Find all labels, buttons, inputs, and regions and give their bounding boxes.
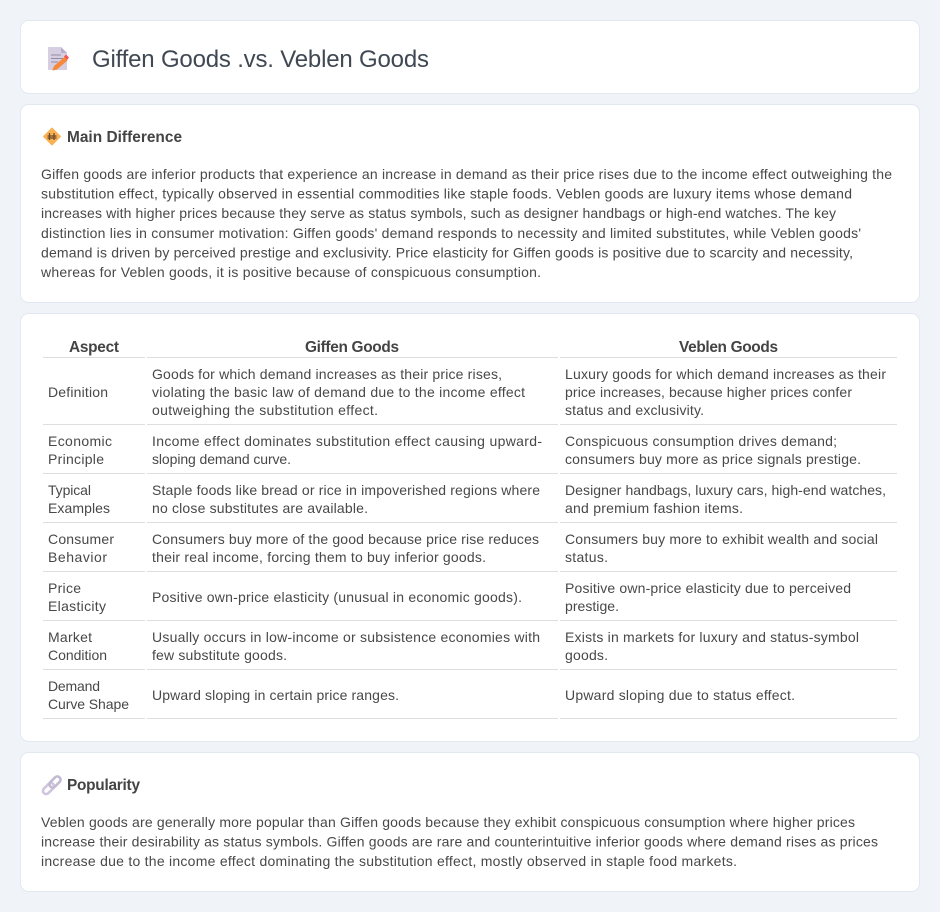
table row: demand curve shape: Upward sloping due to status effect. — [565, 687, 795, 703]
table row: market condition: Condition — [48, 647, 107, 663]
text block: popularity paragraph: Veblen goods are generally more popular than Giffen goods because they exhibit conspicuous consumption where higher prices — [41, 814, 855, 830]
table row: consumer behavior: Behavior — [48, 549, 107, 565]
icon: diamond road sign — [44, 128, 60, 145]
table row: price elasticity — [43, 580, 897, 621]
table row: typical examples: Designer handbags, luxury cars, high-end watches, — [565, 482, 886, 498]
table row: price elasticity: prestige. — [565, 598, 619, 614]
text block: main difference paragraph — [40, 166, 892, 280]
table row: economic principle: Income effect dominates substitution effect causing upward- — [152, 433, 542, 449]
table row: market condition: Market — [48, 629, 92, 645]
table row: market condition: Exists in markets for luxury and status-symbol — [565, 629, 859, 645]
text block: main difference paragraph: whereas for Veblen goods, it is positive because of conspicuous consumption. — [40, 264, 541, 280]
table header row — [43, 339, 897, 358]
text block: main difference paragraph: substitution effect, typically observed in essential commodities like staple foods. Veblen goods are luxury items whose demand — [41, 186, 852, 202]
table row: demand curve shape: Curve Shape — [48, 696, 129, 712]
table row: economic principle: Principle — [48, 451, 104, 467]
table row: typical examples: and premium fashion items. — [565, 500, 743, 516]
table row: consumer behavior: Consumer — [48, 531, 114, 547]
table row: economic principle: sloping demand curve. — [152, 451, 291, 467]
table row: economic principle: Conspicuous consumption drives demand; — [565, 433, 837, 449]
table row: consumer behavior: Consumers buy more to exhibit wealth and social — [565, 531, 878, 547]
heading: popularity: Popularity — [67, 777, 140, 794]
table row: economic principle: Economic — [48, 433, 112, 449]
table row: market condition — [43, 629, 897, 670]
title: Giffen Goods .vs. Veblen Goods — [92, 46, 429, 73]
table row: economic principle — [43, 433, 897, 474]
panel: comparison table — [20, 314, 920, 742]
table row: definition: Luxury goods for which demand increases as their — [565, 366, 886, 382]
panel: title header — [20, 20, 920, 94]
table row: definition: Goods for which demand increases as their price rises, — [152, 366, 502, 382]
table row: consumer behavior — [43, 531, 897, 572]
panel: main difference — [20, 104, 920, 302]
table row: definition: Definition — [48, 384, 108, 400]
table header row: Veblen Goods — [679, 339, 778, 356]
table row: definition: violating the basic law of demand due to the income effect — [152, 384, 525, 400]
text block: popularity paragraph: increase due to the income effect dominating the substitution effect, mostly observed in staple food markets. — [41, 853, 737, 869]
table row: consumer behavior: Consumers buy more of the good because price rise reduces — [152, 531, 539, 547]
panel: popularity — [20, 752, 920, 892]
icon: chain link — [42, 775, 62, 795]
table header row: Giffen Goods — [305, 339, 399, 356]
text block: main difference paragraph: Giffen goods are inferior products that experience an increase in demand as their price rises due to the income effect outweighing the — [41, 166, 892, 182]
table row: market condition: Usually occurs in low-income or subsistence economies with — [152, 629, 540, 645]
table row: demand curve shape: Upward sloping in certain price ranges. — [152, 687, 399, 703]
text block: popularity paragraph: increase their desirability as status symbols. Giffen goods are rare and counterintuitive inferior goods where demand rises as prices — [41, 834, 878, 850]
text block: main difference paragraph: increases with higher prices because they serve as status symbols, such as designer handbags or high-end watches. The key — [41, 205, 836, 221]
table row: definition: price increases, because higher prices confer — [565, 384, 852, 400]
table row: price elasticity: Price — [48, 580, 81, 596]
table row: consumer behavior: status. — [565, 549, 608, 565]
text block: main difference paragraph: demand is driven by perceived prestige and exclusivity. Price elasticity for Giffen goods is positive due to scarcity and necessity, — [41, 244, 853, 260]
table row: definition: outweighing the substitution effect. — [152, 402, 378, 418]
table row: definition: status and exclusivity. — [565, 402, 704, 418]
table header row: Aspect — [69, 339, 119, 356]
heading: main difference: Main Difference — [67, 129, 182, 146]
text block: popularity paragraph — [41, 814, 878, 869]
table row: demand curve shape: Demand — [48, 678, 100, 694]
icon: document with pencil — [48, 47, 69, 70]
text block: main difference paragraph: distinction lies in consumer motivation: Giffen goods' demand responds to necessity and limited substitutes, while Veblen goods' — [41, 225, 861, 241]
table row: typical examples: Examples — [48, 500, 110, 516]
table row: consumer behavior: their real income, forcing them to buy inferior goods. — [152, 549, 486, 565]
table row: typical examples: Typical — [48, 482, 91, 498]
table row: price elasticity: Positive own-price elasticity (unusual in economic goods). — [152, 589, 522, 605]
table row: market condition: few substitute goods. — [152, 647, 287, 663]
table row: definition — [43, 366, 897, 425]
table row: typical examples: no close substitutes are available. — [152, 500, 368, 516]
table row: market condition: goods. — [565, 647, 608, 663]
table row: typical examples: Staple foods like bread or rice in impoverished regions where — [152, 482, 540, 498]
table row: economic principle: consumers buy more as price signals prestige. — [565, 451, 861, 467]
table row: price elasticity: Elasticity — [48, 598, 106, 614]
table row: typical examples — [43, 482, 897, 523]
table row: price elasticity: Positive own-price elasticity due to perceived — [565, 580, 851, 596]
table row: demand curve shape — [43, 678, 897, 719]
